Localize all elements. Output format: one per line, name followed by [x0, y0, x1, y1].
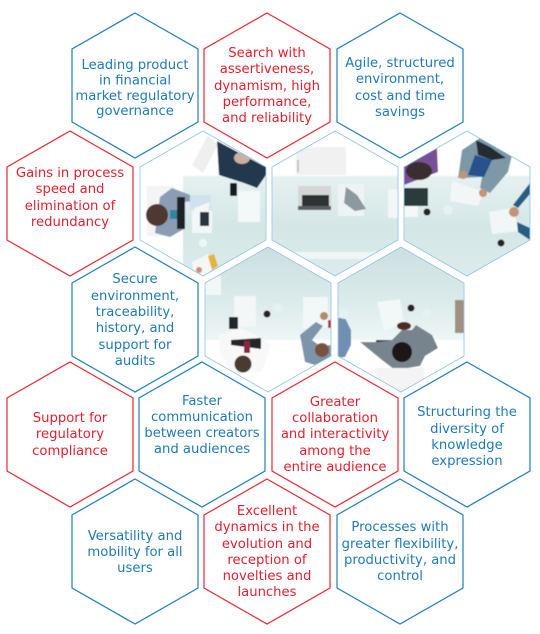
photo hexagon: man in grey suit: [338, 247, 464, 392]
hexagon: secure environment: environment,: [91, 289, 179, 304]
hexagon: excellent dynamics: launches: [237, 585, 297, 600]
hexagon: regulatory compliance: Support for: [33, 411, 108, 426]
hexagon: leading product: governance: [96, 104, 174, 119]
hexagon: leading product: in financial: [99, 74, 171, 88]
hexagon: search with assertiveness: assertiveness,: [220, 62, 314, 77]
hexagon: excellent dynamics: evolution and: [222, 537, 312, 552]
hexagon: processes with flexibility: productivity, and: [344, 553, 456, 568]
hexagon: search with assertiveness: performance,: [223, 95, 311, 110]
hexagon: versatility and mobility: users: [117, 561, 153, 576]
hexagon: excellent dynamics: [204, 479, 330, 624]
hexagon: secure environment: Secure: [112, 272, 158, 287]
hexagon: gains in process speed: redundancy: [31, 215, 109, 230]
hexagon: versatility and mobility: mobility for all: [87, 545, 183, 560]
hexagon: secure environment: audits: [115, 354, 155, 369]
hexagon: agile environment: savings: [375, 105, 425, 120]
hexagon: gains in process speed: Gains in process: [16, 166, 124, 181]
hexagon: greater collaboration: Greater: [310, 395, 361, 410]
hexagon: agile environment: cost and time: [355, 89, 445, 104]
hexagon: versatility and mobility: Versatility and: [88, 529, 182, 544]
hexagon: excellent dynamics: dynamics in the: [214, 520, 320, 535]
hexagon: processes with flexibility: [337, 479, 463, 624]
hexagon: regulatory compliance: regulatory: [36, 427, 104, 442]
hexagon: excellent dynamics: Excellent: [237, 504, 297, 519]
hexagon: gains in process speed: elimination of: [25, 199, 116, 214]
hexagon: regulatory compliance: [7, 362, 133, 507]
hexagon: secure environment: traceability,: [96, 305, 174, 320]
photo hexagon: men at table end: [205, 247, 331, 392]
hexagon: processes with flexibility: Processes with: [351, 520, 449, 535]
hexagon: faster communication: and audiences: [154, 442, 250, 457]
hexagon: processes with flexibility: control: [377, 569, 423, 584]
hexagon: agile environment: [337, 13, 463, 158]
hexagon: search with assertiveness: dynamism, high: [214, 79, 320, 94]
hexagon: search with assertiveness: and reliability: [222, 111, 312, 126]
photo hexagon: woman at table: [140, 131, 266, 276]
photo hexagon: laptop on table: [272, 131, 398, 276]
hexagon: leading product: [72, 13, 198, 158]
hexagon: processes with flexibility: greater flexibility,: [342, 537, 458, 552]
hexagon: agile environment: Agile, structured: [345, 56, 455, 71]
hexagon: agile environment: environment,: [356, 72, 444, 87]
hexagon: structuring diversity: expression: [431, 454, 503, 469]
hexagon: greater collaboration: among the: [299, 444, 371, 459]
hexagon: structuring diversity: knowledge: [431, 438, 503, 453]
hexagon: secure environment: [72, 247, 198, 392]
hexagon: greater collaboration: and interactivity: [281, 427, 389, 442]
hexagon: secure environment: history, and: [96, 321, 174, 336]
hexagon: faster communication: [139, 362, 265, 507]
hexagon: faster communication: between creators: [144, 426, 260, 441]
hexagon: faster communication: Faster: [182, 394, 223, 409]
hexagon: faster communication: communication: [151, 410, 253, 425]
hexagon: secure environment: support for: [99, 338, 172, 353]
hexagon: greater collaboration: collaboration: [292, 411, 378, 426]
hexagon: search with assertiveness: [204, 13, 330, 158]
hexagon: structuring diversity: diversity of: [430, 422, 504, 437]
hexagon: greater collaboration: [272, 362, 398, 507]
hexagon: gains in process speed: speed and: [36, 182, 104, 197]
hexagon: gains in process speed: [7, 131, 133, 276]
hexagon: greater collaboration: entire audience: [283, 460, 387, 475]
hexagon: leading product: Leading product: [82, 58, 188, 73]
hexagon: versatility and mobility: [72, 479, 198, 624]
hexagon: excellent dynamics: reception of: [227, 553, 307, 568]
hexagon: regulatory compliance: compliance: [32, 444, 108, 459]
photo hexagon: man and colleagues: [404, 131, 530, 276]
hexagon: leading product: market regulatory: [75, 89, 195, 104]
hexagon: excellent dynamics: novelties and: [223, 569, 311, 584]
hexagon: structuring diversity: Structuring the: [417, 405, 517, 420]
hexagon: structuring diversity: [404, 362, 530, 507]
hexagon: search with assertiveness: Search with: [228, 46, 306, 61]
